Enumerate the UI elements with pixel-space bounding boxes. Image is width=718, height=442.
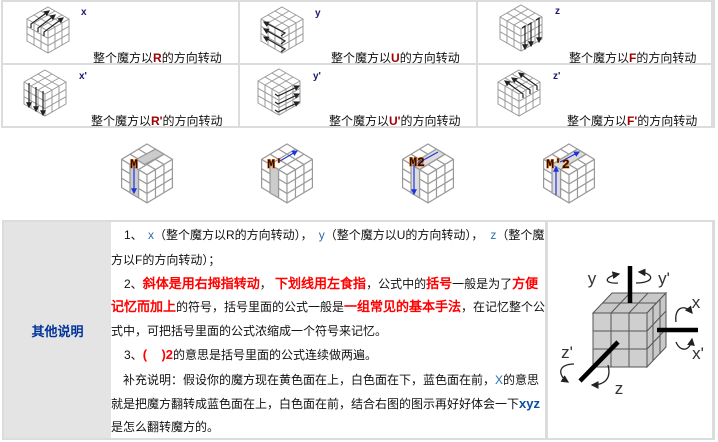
cell: z prime rotation: 整个魔方以F'的方向转动 [567, 113, 697, 128]
cell: y rotation: y [315, 8, 321, 19]
bottom table background [2, 220, 715, 440]
axes [580, 266, 698, 381]
axis labels: y [588, 269, 597, 288]
M prime cube [262, 144, 312, 203]
text block: notes [111, 222, 545, 438]
text block: notes: 2、斜体是用右拇指转动， 下划线用左食指，公式中的括号一般是为了方便 [124, 276, 538, 291]
cell: z prime rotation: z' [553, 71, 560, 82]
axis diagram: z [615, 379, 623, 398]
axis diagram [561, 266, 704, 398]
text block: notes: 1、 x（整个魔方以R的方向转动）， y（整个魔方以U的方向转动）， z（整个魔 [124, 228, 544, 242]
cube body [593, 293, 666, 367]
text block: notes: 记忆而加上的符号，括号里面的公式一般是一组常见的基本手法，在记忆整个公 [111, 299, 545, 314]
picture cell of bottom table [548, 222, 712, 438]
cell: y prime rotation [258, 69, 461, 128]
cell: x rotation: x [81, 7, 87, 18]
text block: notes: 就是把魔方翻转成蓝色面在上，白色面在前，结合右图的图示再好好体会一下xyz [111, 396, 540, 411]
M prime 2 cube: M'2 [546, 157, 570, 172]
cell: z rotation [500, 5, 696, 65]
cell: x prime rotation [24, 70, 223, 128]
cell: x rotation: 整个魔方以R的方向转动 [93, 50, 222, 65]
cell: y rotation: 整个魔方以U的方向转动 [331, 50, 460, 65]
axis diagram: y' [658, 269, 670, 288]
top table background [1, 0, 715, 128]
M cube [122, 144, 172, 203]
M2 cube [403, 144, 453, 203]
M2 cube: M2 [409, 155, 425, 170]
M prime 2 cube [544, 144, 594, 203]
text block: notes: 补充说明：假设你的魔方现在黄色面在上，白色面在下，蓝色面在前，X的意思 [123, 373, 539, 387]
cell: z rotation: z [555, 6, 560, 17]
cell: z rotation: 整个魔方以F的方向转动 [569, 50, 696, 65]
cell: x rotation [27, 7, 222, 65]
M cube: M [130, 157, 138, 172]
M prime cube: M' [267, 157, 283, 172]
rotation arrows [607, 274, 619, 283]
axis diagram: x' [692, 344, 704, 363]
label cell: other notes: 其他说明 [31, 324, 84, 339]
axis diagram: z' [561, 343, 573, 362]
cell: x prime rotation: 整个魔方以R'的方向转动 [91, 113, 223, 128]
axis diagram: x [692, 293, 701, 312]
cell: y prime rotation: 整个魔方以U'的方向转动 [329, 113, 461, 128]
text block: notes: 是怎么翻转魔方的。 [111, 420, 219, 434]
text block: notes: 3、( )2的意思是括号里面的公式连续做两遍。 [124, 347, 377, 362]
cell: x prime rotation: x' [79, 71, 87, 82]
cell: y prime rotation: y' [313, 71, 321, 82]
label cell: other notes [4, 222, 111, 438]
text block: notes: 式中，可把括号里面的公式浓缩成一个符号来记忆。 [111, 324, 387, 338]
text block: notes: 方以F的方向转动）； [111, 253, 220, 267]
cell: y rotation [261, 7, 460, 65]
cell: z prime rotation [498, 70, 697, 128]
